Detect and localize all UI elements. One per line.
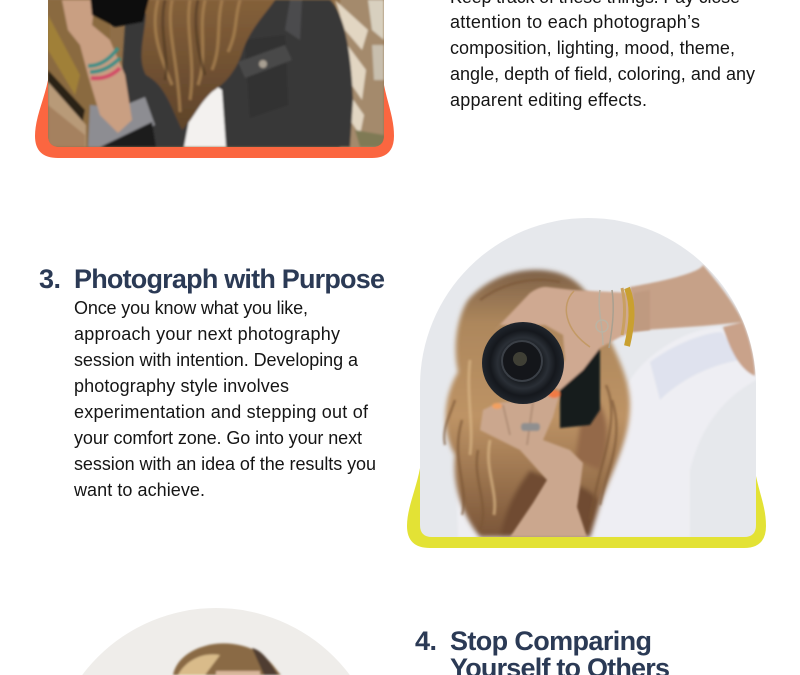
raised hand (492, 287, 633, 390)
jacket (120, 0, 353, 147)
step 3 body text: approach your next photography (74, 324, 340, 344)
panel: step 4 circular photo (82, 608, 350, 675)
bracelets (88, 48, 120, 72)
shirt (184, 75, 226, 147)
step 2 body text (450, 0, 755, 110)
step 3 body text: session with intention. Developing a (74, 350, 359, 370)
yellow backing shape (407, 468, 766, 548)
step 3 body text: Once you know what you like, (74, 298, 308, 318)
step 3 body text: want to achieve. (73, 480, 205, 500)
heading: step 3: Photograph with Purpose (74, 264, 385, 294)
step 3 body text (73, 298, 376, 500)
orange backing shape (35, 80, 394, 158)
shirt (648, 330, 755, 402)
bracelets (566, 288, 632, 348)
photo: woman in denim jacket (48, 0, 384, 150)
upper arm (630, 265, 743, 331)
step 3 body text: photography style involves (74, 376, 289, 396)
step 3 body text: experimentation and stepping out of (74, 402, 369, 422)
panel: step 3 photo with yellow backing (407, 218, 766, 548)
step 3 body text: your comfort zone. Go into your next (74, 428, 362, 448)
hair (445, 270, 630, 537)
heading: step 4: 4. (415, 626, 437, 656)
step 2 body text: attention to each photograph’s (450, 12, 700, 32)
heading: step 3: 3. (39, 264, 61, 294)
sleeve (88, 97, 155, 147)
heading: step 4 (415, 626, 670, 675)
step 3 body text: session with an idea of the results you (74, 454, 376, 474)
step 2 body text: apparent editing effects. (450, 90, 647, 110)
lens (482, 322, 564, 404)
camera body (560, 345, 600, 428)
panel: step 2 photo with orange backing (35, 0, 394, 158)
arm (62, 0, 132, 133)
hair (142, 0, 275, 130)
step 2 body text: angle, depth of field, coloring, and any (450, 64, 755, 84)
photo: woman holding camera (420, 218, 756, 538)
lower hand and forearm (480, 393, 587, 537)
step 2 body text: composition, lighting, mood, theme, (450, 38, 735, 58)
photo: hair top (173, 643, 281, 675)
heading: step 4: Stop Comparing (450, 626, 652, 656)
camera (90, 0, 150, 27)
